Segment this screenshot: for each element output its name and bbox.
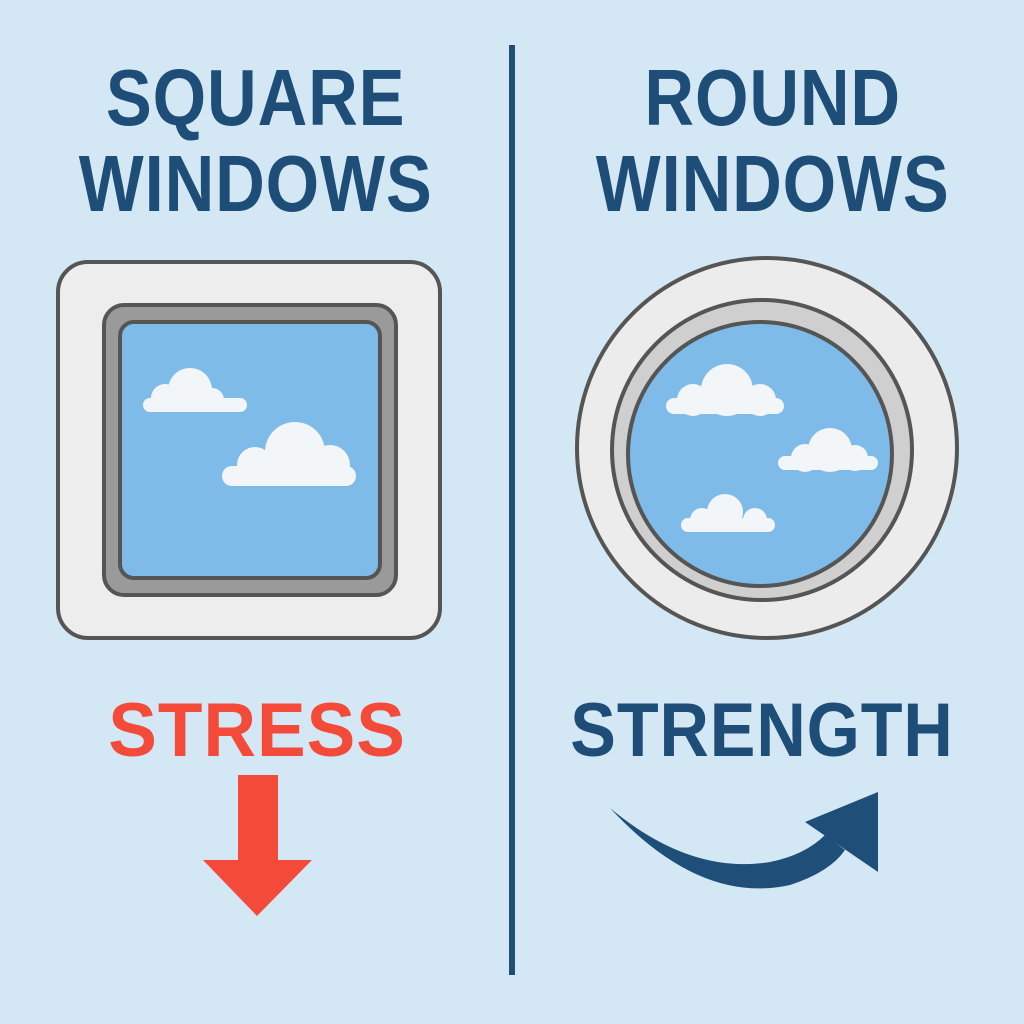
divider: [509, 45, 515, 975]
title: square windows: [78, 53, 433, 228]
label: stress: STRESS: [108, 688, 406, 773]
title: round windows: ROUND: [645, 53, 901, 142]
label: strength: STRENGTH: [570, 688, 954, 773]
title: square windows: SQUARE: [106, 53, 406, 142]
title: round windows: WINDOWS: [596, 139, 950, 228]
title: square windows: WINDOWS: [79, 139, 433, 228]
title: round windows: [596, 53, 950, 228]
